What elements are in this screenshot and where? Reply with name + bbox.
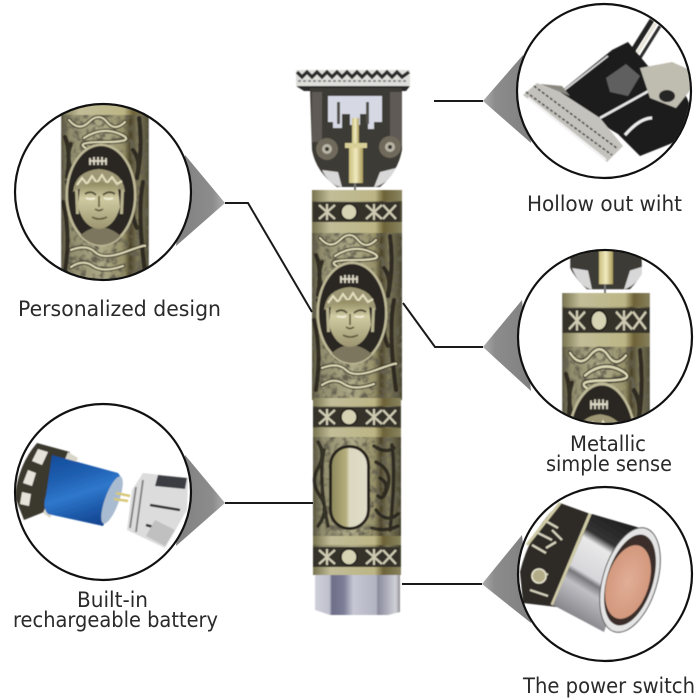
connector lines [225,101,483,584]
trimmer head [310,88,402,190]
label: hollow out: Hollow out wiht [527,192,682,216]
label: built-in rechargeable battery [13,588,218,632]
body close-up [561,251,651,423]
callout: hollow out blade [483,4,692,178]
battery illustration [15,443,188,548]
label: metallic simple sense [546,432,672,476]
trimmer: central product [296,70,410,615]
callout: power switch [482,487,692,661]
label: built-in rechargeable battery: rechargeable battery [13,608,218,632]
blade [296,70,410,91]
zoomed buddha engraving [60,105,150,279]
callout: metallic simple sense [483,248,694,426]
pointer triangle [176,155,225,246]
pointer triangle [483,300,531,391]
silver end cap [315,575,400,615]
label: personalized design: Personalized design [18,297,221,321]
callout: built-in battery [15,404,225,580]
pointer triangle [482,535,531,623]
upper body with buddha [312,190,402,400]
label: metallic simple sense: simple sense [546,452,672,476]
pointer triangle [176,455,225,546]
label: built-in rechargeable battery: Built-in [77,588,148,612]
label: metallic simple sense: Metallic [570,432,646,456]
callout: personalized design [14,102,225,282]
end cap close-up [520,503,672,640]
lower body with switch window [313,398,401,575]
blade close-up [523,20,692,162]
pointer triangle [483,55,531,143]
